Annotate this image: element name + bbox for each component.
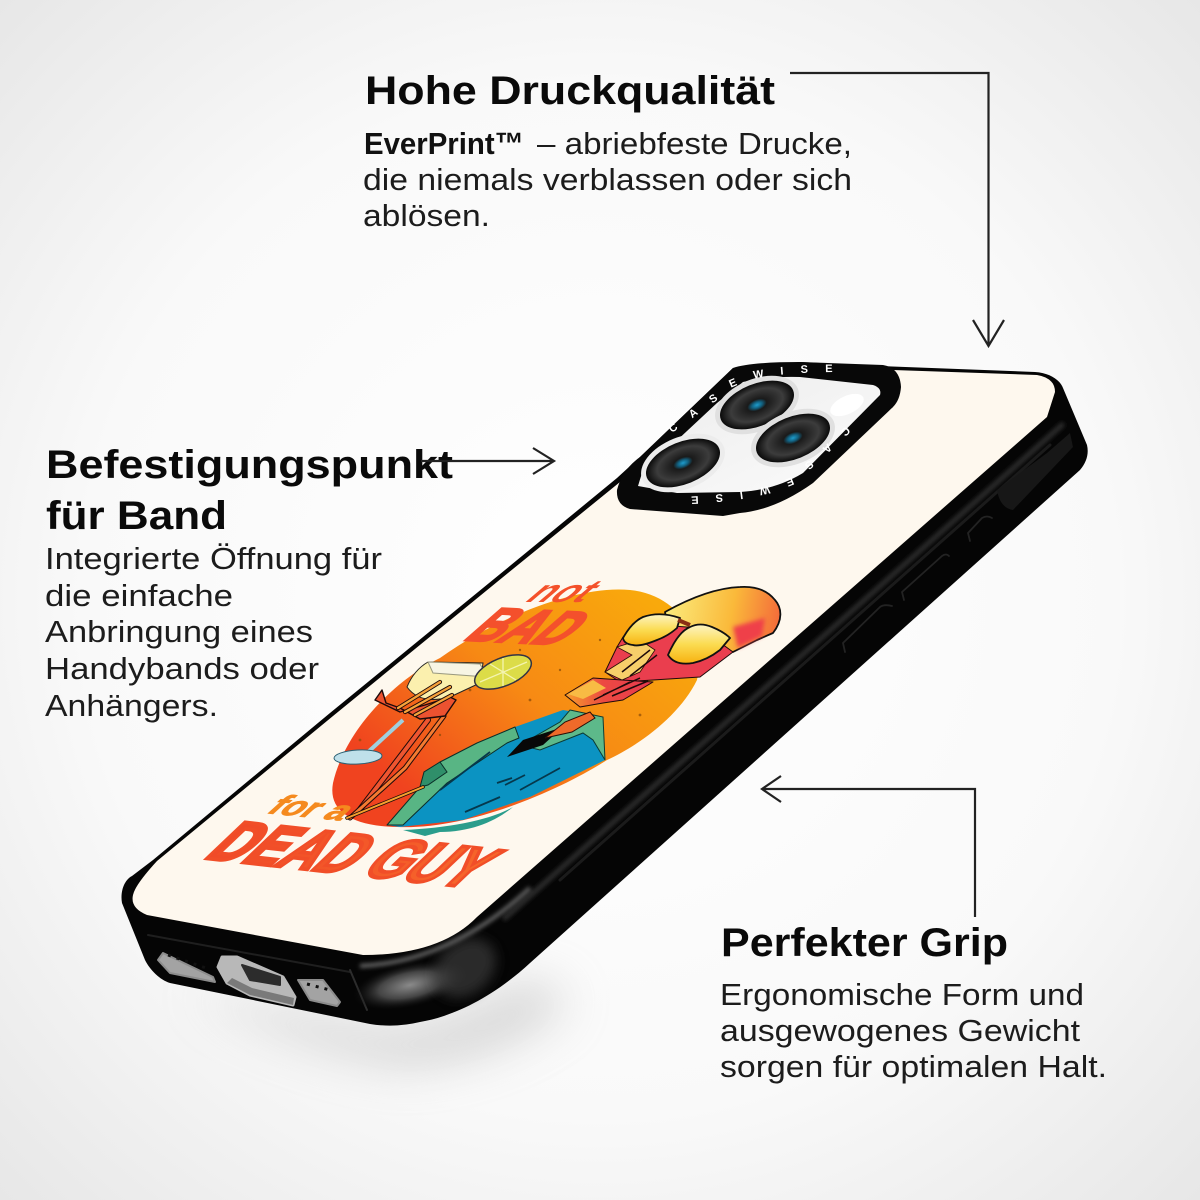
nose and upper teeth <box>605 640 655 680</box>
corner gloss <box>349 888 530 1019</box>
arrow <box>790 73 1004 346</box>
phone shadow <box>190 980 570 1065</box>
neck <box>545 712 595 738</box>
phone case <box>122 362 1088 1026</box>
body text: Integrierte Öffnung für <box>45 541 382 576</box>
charging port <box>218 957 295 1005</box>
body text: die einfache <box>45 578 233 613</box>
lime slice <box>470 648 536 696</box>
camera window <box>638 377 880 493</box>
orange sun <box>332 589 698 827</box>
cuff <box>420 762 447 787</box>
jaw and teeth <box>565 650 657 707</box>
body text: sorgen für optimalen Halt. <box>720 1049 1107 1084</box>
lens top <box>706 364 808 446</box>
printed back panel <box>133 370 1055 955</box>
bottom right speaker <box>298 980 340 1006</box>
shirt opening <box>507 727 563 757</box>
collar <box>520 710 605 760</box>
headline for a: for a <box>259 789 367 826</box>
camera island <box>616 362 901 516</box>
lens right <box>742 397 844 479</box>
body text <box>720 977 1107 1084</box>
case body <box>121 362 1088 1026</box>
feature: print quality <box>363 69 1004 346</box>
body text: EverPrint™ <box>364 126 524 161</box>
ring brand text upper: CASEWISE <box>670 364 832 432</box>
flash <box>827 389 867 421</box>
headline not: not <box>515 573 615 609</box>
body text: ausgewogenes Gewicht <box>720 1013 1080 1048</box>
body text <box>363 126 852 233</box>
lens left <box>632 422 734 504</box>
red patch <box>733 618 765 648</box>
body text: Ergonomische Form und <box>720 977 1084 1012</box>
side groove highlights <box>148 425 1062 1010</box>
skull dome <box>665 587 780 652</box>
skeleton arm <box>347 716 444 818</box>
sunglasses <box>623 614 730 664</box>
arrow <box>762 776 975 917</box>
heading: für Band <box>46 494 227 538</box>
heading: Hohe Druckqualität <box>365 69 775 113</box>
camera frame <box>617 362 901 516</box>
teal splash <box>403 807 513 836</box>
body text: – abriebfeste Drucke, <box>537 126 852 161</box>
headline BAD: BAD <box>450 599 607 655</box>
body text: Anhängers. <box>45 688 218 723</box>
mute switch pad <box>997 433 1073 510</box>
heading: Perfekter Grip <box>721 921 1008 965</box>
heading: Befestigungspunkt <box>46 443 453 487</box>
body text: die niemals verblassen oder sich <box>363 162 852 197</box>
bottom left speaker <box>158 953 215 982</box>
cocktail glass <box>334 662 487 765</box>
jacket <box>387 710 605 827</box>
sleeve <box>387 727 519 825</box>
feature: grip <box>720 776 1107 1084</box>
artwork <box>191 573 780 898</box>
skeleton hand <box>375 682 456 719</box>
arrow <box>421 448 554 474</box>
body text: Handybands oder <box>45 651 319 686</box>
side buttons <box>843 516 992 652</box>
skull face <box>605 625 733 682</box>
body text: Anbringung eines <box>45 614 313 649</box>
sun specks <box>359 639 641 741</box>
body text: ablösen. <box>363 198 490 233</box>
feature: strap attachment <box>45 443 554 723</box>
heading <box>46 443 453 538</box>
body text <box>45 541 382 723</box>
headline DEAD GUY: DEAD GUY <box>191 811 518 898</box>
ring brand text lower: CASEWISE <box>692 428 850 504</box>
